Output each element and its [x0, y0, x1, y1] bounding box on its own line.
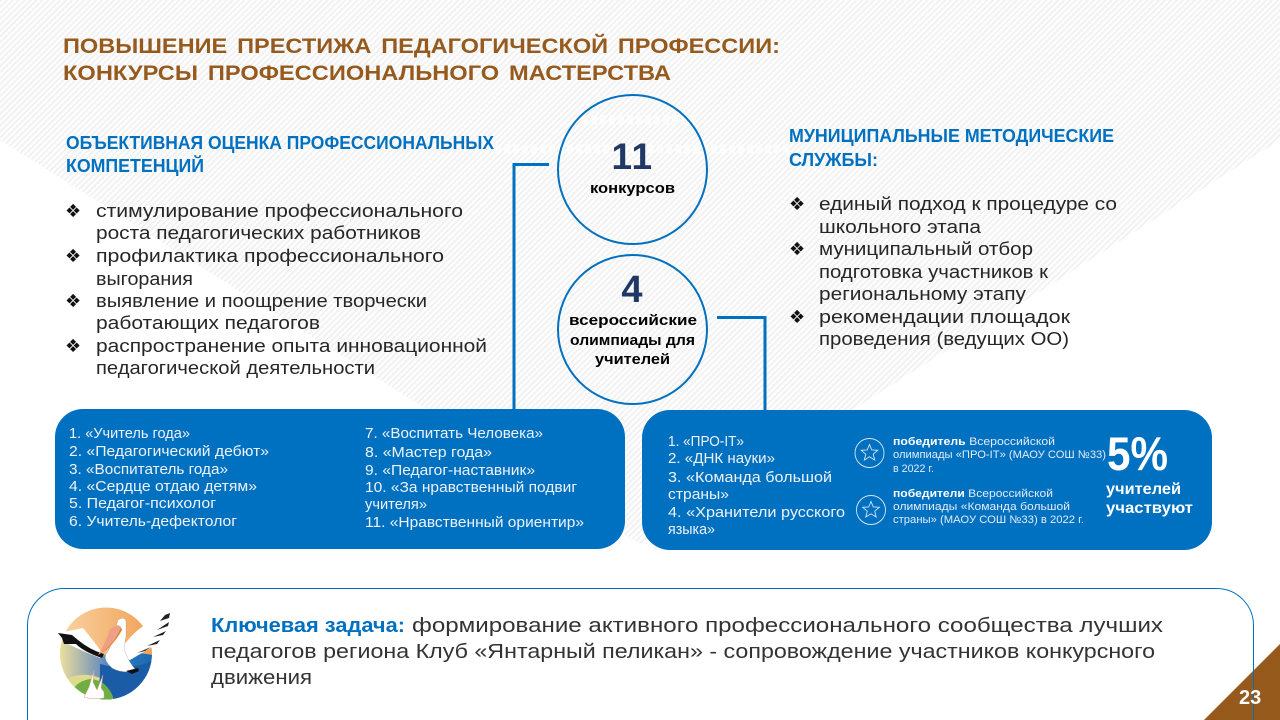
- winner note 1: [893, 436, 1106, 475]
- olympiad list: страны»: [668, 487, 729, 503]
- panel: list of competitions: 10. «За нравственный подвиг: [365, 480, 577, 496]
- hatched background: [0, 0, 1280, 544]
- title: КОНКУРСЫ ПРОФЕССИОНАЛЬНОГО МАСТЕРСТВА: [63, 61, 671, 85]
- title: ПОВЫШЕНИЕ ПРЕСТИЖА ПЕДАГОГИЧЕСКОЙ ПРОФЕССИИ:: [63, 33, 780, 58]
- left bullet list: педагогической деятельности: [96, 357, 375, 378]
- page number: 23: [1239, 687, 1261, 709]
- right bullet list: ❖: [789, 194, 805, 215]
- left bullet list: ❖: [65, 291, 81, 312]
- right wing: [117, 613, 170, 660]
- winner note 2: олимпиады «Команда большой: [893, 501, 1070, 513]
- right heading: СЛУЖБЫ:: [789, 149, 878, 170]
- panel: list of competitions: 7. «Воспитать Человека»: [365, 426, 543, 442]
- right bullet list: муниципальный отбор: [819, 238, 1033, 259]
- connector: competitions circle to left panel: [514, 164, 549, 410]
- right bullet list: ❖: [789, 307, 805, 328]
- right heading: МУНИЦИПАЛЬНЫЕ МЕТОДИЧЕСКИЕ: [789, 125, 1114, 146]
- left heading: КОМПЕТЕНЦИЙ: [66, 155, 204, 176]
- stat: 5% of teachers: [1106, 427, 1193, 517]
- icon: pelican logo: [58, 607, 170, 700]
- olympiad list: 4. «Хранители русского: [668, 505, 845, 521]
- circle: 4 olympiads: 4: [621, 269, 643, 311]
- panel: list of competitions: 8. «Мастер года»: [365, 445, 492, 461]
- winner note 2: победители Всероссийской: [893, 488, 1053, 500]
- icon: star badge 2: [856, 496, 886, 524]
- right bullet list: подготовка участников к: [819, 261, 1049, 282]
- circle: 11 competitions: 11: [611, 136, 654, 177]
- icon: star badge 1: [855, 438, 884, 468]
- left bullet list: профилактика профессионального: [96, 245, 444, 266]
- key task text: Ключевая задача:: [211, 614, 405, 637]
- left bullet list: работающих педагогов: [96, 312, 320, 333]
- left bullet list: роста педагогических работников: [96, 222, 421, 243]
- panel: key task: [28, 588, 1254, 720]
- key task text: движения: [211, 666, 312, 689]
- circle: 4 olympiads: всероссийские: [569, 312, 697, 329]
- winner note 1: олимпиады «ПРО-IT» (МАОУ СОШ №33): [893, 449, 1106, 461]
- beak: [98, 625, 121, 655]
- circle: 4 olympiads: [558, 255, 707, 404]
- chicks: [84, 670, 104, 699]
- panel: list of competitions: [55, 409, 625, 549]
- stat: 5% of teachers: 5%: [1107, 427, 1168, 480]
- olympiad list: 2. «ДНК науки»: [668, 451, 775, 467]
- left bullet list: ❖: [65, 246, 81, 267]
- panel: list of competitions: 4. «Сердце отдаю детям»: [69, 479, 257, 495]
- left bullet list: выявление и поощрение творчески: [96, 290, 427, 311]
- circle: 4 olympiads: олимпиады для: [570, 332, 695, 349]
- title: [63, 33, 780, 85]
- panel: list of competitions: 11. «Нравственный ориентир»: [365, 515, 584, 531]
- right column: municipal services: [789, 125, 1117, 349]
- key task text: формирование активного профессионального сообщества лучших: [412, 614, 1164, 637]
- winner note 1: в 2022 г.: [893, 463, 934, 475]
- left bullet list: выгорания: [96, 268, 193, 289]
- circle: 11 competitions: конкурсов: [590, 180, 675, 197]
- right bullet list: школьного этапа: [819, 216, 982, 237]
- right bullet list: региональному этапу: [819, 283, 1027, 304]
- winner note 1: победитель Всероссийской: [893, 436, 1055, 448]
- circle: 4 olympiads: учителей: [595, 351, 670, 368]
- circle: 11 competitions: [558, 95, 707, 244]
- panel: list of competitions: 6. Учитель-дефектолог: [69, 514, 237, 530]
- olympiad list: [668, 434, 845, 538]
- winner note 2: страны» (МАОУ СОШ №33) в 2022 г.: [893, 514, 1084, 526]
- olympiad list: 1. «ПРО-IT»: [668, 434, 744, 450]
- left bullet list: [65, 200, 487, 378]
- left heading: ОБЪЕКТИВНАЯ ОЦЕНКА ПРОФЕССИОНАЛЬНЫХ: [66, 132, 495, 153]
- panel: list of competitions: учителя»: [365, 497, 427, 513]
- stat: 5% of teachers: учителей: [1106, 481, 1181, 498]
- panel: list of competitions: 2. «Педагогический дебют»: [69, 444, 269, 460]
- right bullet list: единый подход к процедуре со: [819, 193, 1117, 214]
- panel: list of competitions: 9. «Педагог-наставник»: [365, 463, 535, 479]
- olympiad list: языка»: [668, 522, 715, 538]
- left bullet list: ❖: [65, 336, 81, 357]
- corner triangle: [1204, 644, 1280, 720]
- right bullet list: [789, 193, 1117, 349]
- winner note 2: [893, 488, 1084, 526]
- stat: 5% of teachers: участвуют: [1106, 500, 1193, 517]
- left wing: [58, 628, 104, 658]
- left bullet list: стимулирование профессионального: [96, 200, 463, 221]
- left heading: [66, 132, 495, 176]
- panel: list of competitions: 3. «Воспитатель года»: [69, 462, 228, 478]
- right heading: [789, 125, 1114, 170]
- body: [105, 618, 136, 672]
- key task text: педагогов региона Клуб «Янтарный пеликан» - сопровождение участников конкурсного: [211, 640, 1155, 663]
- left column: objective assessment: [65, 132, 495, 378]
- panel: list of competitions: 5. Педагог-психолог: [69, 496, 216, 512]
- key task text: [211, 614, 1164, 689]
- right bullet list: рекомендации площадок: [819, 306, 1071, 327]
- left bullet list: распространение опыта инновационной: [96, 335, 487, 356]
- connector: olympiads circle to right panel: [717, 318, 765, 410]
- panel: olympiads and winners: [642, 410, 1212, 550]
- right bullet list: ❖: [789, 239, 805, 260]
- panel: list of competitions: 1. «Учитель года»: [69, 426, 190, 442]
- olympiad list: 3. «Команда большой: [668, 470, 832, 486]
- right bullet list: проведения (ведущих ОО): [819, 328, 1069, 349]
- left bullet list: ❖: [65, 201, 81, 222]
